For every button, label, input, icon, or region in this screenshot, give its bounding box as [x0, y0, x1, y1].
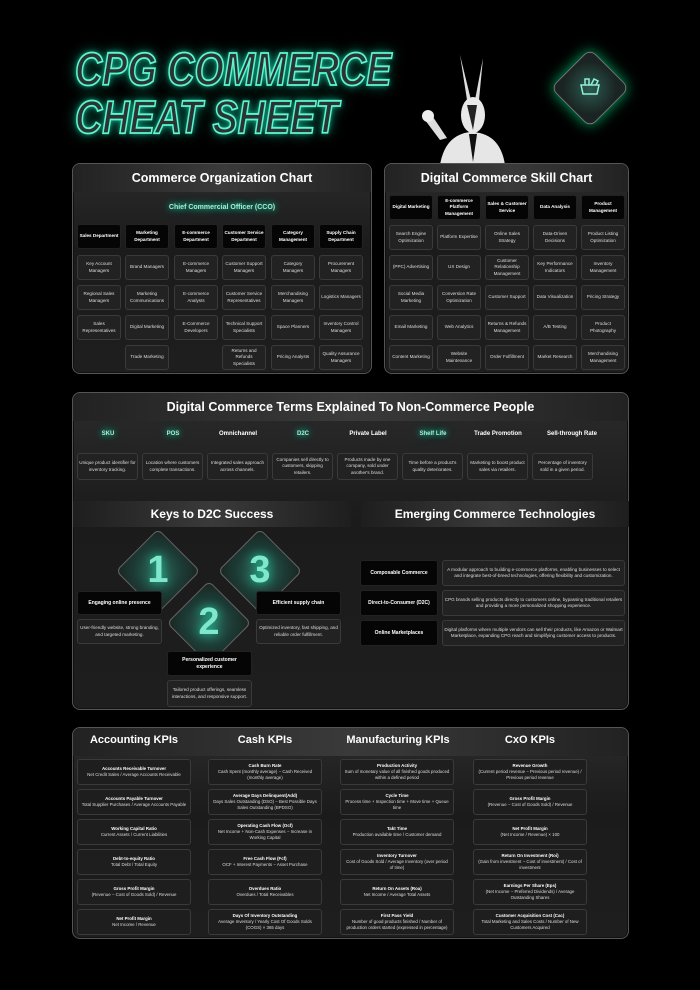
accounting KPI column: Accounts Receivable Turnover	[102, 766, 166, 771]
accounting KPI column: Total Supplier Purchases / Average Accounts Payable	[82, 802, 186, 807]
heading: cash KPIs: Cash KPIs	[238, 734, 292, 746]
panel: commerce organization chart: Brand Managers	[130, 264, 164, 269]
manufacturing KPI column	[340, 759, 454, 935]
heading: manufacturing KPIs: Manufacturing KPIs	[346, 734, 450, 746]
panel: commerce organization chart: Regional Sales Managers	[84, 291, 114, 302]
panel: commerce organization chart: Marketing Department	[134, 230, 160, 242]
panel: digital commerce skill chart: Search Engine Optimization	[396, 231, 426, 242]
panel: digital commerce skill chart: E-commerce Platform Management	[445, 198, 473, 216]
heading: keys to D2C	[73, 501, 351, 527]
key 1: Engaging online presence	[88, 600, 151, 606]
heading: skill chart: Digital Commerce Skill Chart	[421, 171, 592, 185]
CxO KPI column: Customer Acquisition Cost (Cac)	[496, 913, 564, 918]
cash KPI column: Overdues / Total Receivables	[236, 892, 294, 897]
panel: digital commerce skill chart: Customer Relationship Management	[494, 258, 520, 276]
panel: digital commerce skill chart: Content Marketing	[392, 354, 430, 359]
manufacturing KPI column: Net Income / Average Total Assets	[364, 892, 430, 897]
panel: digital commerce skill chart: Website Maintenance	[446, 351, 472, 362]
panel: digital commerce skill chart: Customer Support	[488, 294, 526, 299]
panel: commerce organization chart: Space Planners	[277, 324, 309, 329]
terms row: Time before a product's quality deteriorates.	[409, 460, 456, 472]
manufacturing KPI column: First Pass Yield	[381, 913, 413, 918]
key 2	[167, 651, 252, 707]
cash KPI column: Cash Burn Rate	[249, 763, 281, 768]
cash KPI column: OCF + Interest Payments − Asset Purchase	[222, 862, 308, 867]
heading: terms	[73, 393, 628, 421]
manufacturing KPI column: Sum of monetary value of all finished goods produced within a defined period	[345, 769, 449, 780]
cash KPI column: Average Inventory / Yearly Cost Of Goods Solds (COGS) × 365 days	[218, 919, 312, 930]
heading: keys to D2C: Keys to D2C Success	[151, 507, 273, 521]
terms row: Sell-through Rate	[547, 431, 597, 437]
panel: commerce organization chart	[72, 163, 372, 374]
panel: digital commerce skill chart: Order Fulfillment	[490, 354, 524, 359]
icon: shopping basket diamond	[544, 42, 636, 134]
panel: commerce organization chart: Quality Assurance Managers	[322, 351, 360, 362]
heading: org chart: Commerce Organization Chart	[132, 171, 312, 185]
terms row: Omnichannel	[219, 431, 257, 437]
accounting KPI column: Gross Profit Margin	[114, 886, 154, 891]
manufacturing KPI column: Cost of Goods Sold / Average Inventory (over period of time)	[346, 859, 448, 870]
terms row: Unique product identifier for inventory tracking.	[79, 460, 136, 472]
panel: digital commerce skill chart: Data Visualization	[537, 294, 573, 299]
CxO KPI column: Gross Profit Margin	[510, 796, 550, 801]
panel: commerce organization chart: E-commerce Managers	[183, 261, 209, 272]
key 1	[77, 591, 162, 644]
panel: digital commerce skill chart: UX Design	[448, 264, 470, 269]
manufacturing KPI column: Number of good products finished / Number of production orders started (expressed in percentage)	[346, 919, 448, 930]
accounting KPI column: Total Debt / Total Equity	[111, 862, 157, 867]
panel: commerce organization chart: Category Managers	[283, 261, 303, 272]
panel: digital commerce skill chart: Web Analytics	[445, 324, 473, 329]
CCO label: Chief Commercial Officer (CCO)	[169, 204, 275, 211]
accounting KPI column: Debt-to-equity Ratio	[113, 856, 155, 861]
panel: digital commerce skill chart: Inventory Management	[590, 261, 616, 272]
panel: commerce organization chart: E-Commerce Developers	[182, 321, 210, 332]
key 3: Optimized inventory, fast shipping, and reliable order fulfillment.	[259, 625, 338, 636]
panel: commerce organization chart: Merchandising Managers	[278, 291, 308, 302]
panel: digital commerce skill chart	[384, 163, 629, 374]
CxO KPI column: (Current period revenue − Previous period revenue) / Previous period revenue	[478, 769, 582, 780]
key 1: User-friendly website, strong branding, and targeted marketing.	[80, 625, 159, 636]
CxO KPI column: Total Marketing and Sales Costs / Number of New Customers Acquired	[481, 919, 579, 930]
panel: digital commerce skill chart: Email Marketing	[395, 324, 427, 329]
emerging tech rows: Online Marketplaces	[375, 630, 423, 636]
illustration: goat mascot	[422, 55, 505, 163]
title: CHEAT SHEET	[75, 91, 338, 143]
heading: skill chart	[385, 164, 628, 192]
panel: commerce organization chart: Returns and Refunds Specialists	[231, 348, 257, 366]
key 2: Tailored product offerings, seamless interactions, and responsive support.	[172, 687, 247, 698]
terms row: Integrated sales approach across channels.	[211, 460, 264, 472]
manufacturing KPI column: Production available time / Customer demand	[353, 832, 441, 837]
CxO KPI column: (Revenue − Cost of Goods Sold) / Revenue	[488, 802, 572, 807]
key 2: Personalized customer experience	[182, 657, 237, 670]
heading: emerging technologies	[361, 501, 629, 527]
panel: commerce organization chart: Customer Service Representatives	[226, 291, 262, 302]
panel: digital commerce skill chart: Key Performance Indicators	[537, 261, 573, 272]
emerging tech rows: A modular approach to building e-commerce platforms, enabling businesses to select and integrate best-of-breed technologies, offering flexibility and customization.	[447, 567, 620, 578]
panel: commerce organization chart: Supply Chain Department	[326, 230, 356, 242]
terms row: Private Label	[349, 431, 387, 437]
panel: digital commerce skill chart: Platform Expertise	[440, 234, 478, 239]
panel: digital commerce skill chart: Pricing Strategy	[587, 294, 619, 299]
terms row: Products made by one company, sold under another's brand.	[345, 457, 390, 475]
CxO KPI column: Revenue Growth	[513, 763, 547, 768]
manufacturing KPI column: Cycle Time	[385, 793, 409, 798]
D2C diamonds	[118, 531, 300, 651]
cash KPI column: Cash Spent (monthly average) − Cash Received (monthly average)	[218, 769, 312, 780]
cash KPI column: Average Days Delinquent(Add)	[233, 793, 297, 798]
terms row: Shelf Life	[419, 431, 446, 437]
panel: commerce organization chart: Customer Service Department	[224, 230, 264, 242]
terms row: Percentage of inventory sold in a given period.	[538, 460, 587, 472]
terms row: Location where customers complete transactions.	[146, 460, 199, 472]
manufacturing KPI column: Return On Assets (Roa)	[372, 886, 422, 891]
emerging tech rows: Digital platforms where multiple vendors can sell their products, like Amazon or Walmart Marketplace, expanding CPG reach and simplifying customer access to products.	[444, 627, 623, 638]
emerging tech rows: Composable Commerce	[370, 570, 428, 576]
panel: digital commerce skill chart: Digital Marketing	[392, 204, 430, 209]
accounting KPI column: Working Capital Ratio	[111, 826, 157, 831]
accounting KPI column: Accounts Payable Turnover	[105, 796, 163, 801]
terms row: POS	[167, 431, 179, 437]
emerging tech rows: CPG brands selling products directly to customers online, bypassing traditional retailers and providing a more personalized shopping experience.	[445, 597, 622, 608]
title: CPG COMMERCE	[75, 43, 391, 95]
key 3: Efficient supply chain	[273, 600, 324, 606]
panel: digital commerce skill chart: Returns & Refunds Management	[488, 321, 526, 332]
panel: commerce organization chart: Digital Marketing	[130, 324, 164, 329]
panel: digital commerce skill chart: Sales & Customer Service	[487, 201, 527, 212]
CxO KPI column: Net Profit Margin	[512, 826, 548, 831]
accounting KPI column: Net Profit Margin	[116, 916, 152, 921]
D2C diamonds: 1	[147, 549, 169, 591]
panel: digital commerce skill chart: Merchandising Management	[588, 351, 618, 362]
panel: digital commerce skill chart: Product Listing Optimization	[588, 231, 618, 242]
terms row: D2C	[297, 431, 309, 437]
panel: digital commerce skill chart: Conversion Rate Optimization	[442, 291, 476, 302]
panel: terms, D2C keys and emerging technologies	[72, 392, 629, 710]
CxO KPI column: (Gain from investment − Cost of investment) / Cost of investment	[478, 859, 582, 870]
manufacturing KPI column: Inventory Turnover	[377, 853, 417, 858]
cash KPI column: Free Cash Flow (Fcf)	[243, 856, 287, 861]
panel: digital commerce skill chart: (PPC) Advertising	[393, 264, 429, 269]
terms row: SKU	[102, 431, 114, 437]
terms row: Companies sell directly to customers, skipping retailers.	[276, 457, 329, 475]
panel: commerce organization chart: Customer Support Managers	[225, 261, 263, 272]
manufacturing KPI column: Takt Time	[387, 826, 407, 831]
accounting KPI column: Current Assets / Current Liabilities	[101, 832, 167, 837]
panel: digital commerce skill chart: A/B Testing	[543, 324, 567, 329]
D2C diamonds: 3	[249, 549, 271, 591]
CxO KPI column: (Net Income / Revenue) × 100	[501, 832, 559, 837]
CxO KPI column: Earnings Per Share (Eps)	[504, 883, 556, 888]
accounting KPI column: Net Credit Sales / Average Accounts Receivable	[87, 772, 181, 777]
cash KPI column: Overdues Ratio	[249, 886, 281, 891]
CxO KPI column: (Net Income − Preferred Dividends) / Average Outstanding Shares	[486, 889, 574, 900]
panel: digital commerce skill chart: Market Research	[538, 354, 572, 359]
D2C diamonds: 2	[198, 601, 220, 643]
panel: commerce organization chart: Sales Department	[80, 233, 118, 238]
panel: commerce organization chart: Procurement Managers	[328, 261, 354, 272]
heading: emerging technologies: Emerging Commerce Technologies	[395, 507, 595, 521]
panel: commerce organization chart: Trade Marketing	[130, 354, 164, 359]
heading: accounting KPIs: Accounting KPIs	[90, 734, 178, 746]
manufacturing KPI column: Production Activity	[377, 763, 417, 768]
panel: commerce organization chart: Logistics Managers	[321, 294, 361, 299]
CxO KPI column	[473, 759, 587, 935]
panel: commerce organization chart: Technical Support Specialists	[226, 321, 262, 332]
panel: commerce organization chart: Key Account Managers	[86, 261, 112, 272]
panel: commerce organization chart: Inventory Control Managers	[324, 321, 358, 332]
accounting KPI column	[77, 759, 191, 935]
panel: commerce organization chart: Marketing Communications	[130, 291, 164, 302]
panel: commerce organization chart: E-commerce Analysts	[183, 291, 209, 302]
panel: digital commerce skill chart: Social Media Marketing	[398, 291, 424, 302]
cash KPI column	[208, 759, 322, 935]
CxO KPI column: Return On Investment (Roi)	[501, 853, 559, 858]
accounting KPI column: (Revenue − Cost of Goods Sold) / Revenue	[92, 892, 176, 897]
emerging tech rows	[361, 560, 625, 646]
cash KPI column: Days Sales Outstanding (DSO) − Best Possible Days Sales Outstanding (BPDSO)	[213, 799, 317, 810]
cash KPI column: Net Income + Non-Cash Expenses − Increase in Working Capital	[218, 829, 312, 840]
heading: org chart	[73, 164, 371, 192]
manufacturing KPI column: Process time + Inspection time + Move time + Queue time	[345, 799, 449, 810]
cash KPI column: Days Of Inventory Outstanding	[233, 913, 297, 918]
key 3	[256, 591, 341, 644]
heading: CxO KPIs: CxO KPIs	[505, 734, 555, 746]
emerging tech rows: Direct-to-Consumer (D2C)	[368, 600, 430, 606]
terms row: Trade Promotion	[474, 431, 522, 437]
panel: digital commerce skill chart: Product Photography	[590, 321, 616, 332]
panel: commerce organization chart: Pricing Analysts	[277, 354, 309, 359]
panel: commerce organization chart: Sales Representatives	[82, 321, 116, 332]
panel: digital commerce skill chart: Data Analysis	[540, 204, 570, 209]
panel: KPIs	[72, 727, 629, 939]
panel: digital commerce skill chart: Product Management	[589, 201, 617, 212]
terms row: Marketing to boost product sales via retailers.	[470, 460, 525, 472]
panel: digital commerce skill chart: Data-Driven Decisions	[543, 231, 567, 242]
heading: terms: Digital Commerce Terms Explained To Non-Commerce People	[167, 400, 534, 414]
title	[68, 43, 398, 143]
panel: commerce organization chart: E-commerce Department	[182, 230, 210, 242]
cash KPI column: Operating Cash Flow (Ocf)	[237, 823, 293, 828]
terms row	[77, 425, 597, 480]
panel: commerce organization chart: Category Management	[279, 230, 307, 242]
panel: digital commerce skill chart: Online Sales Strategy	[494, 231, 520, 242]
accounting KPI column: Net Income / Revenue	[112, 922, 156, 927]
